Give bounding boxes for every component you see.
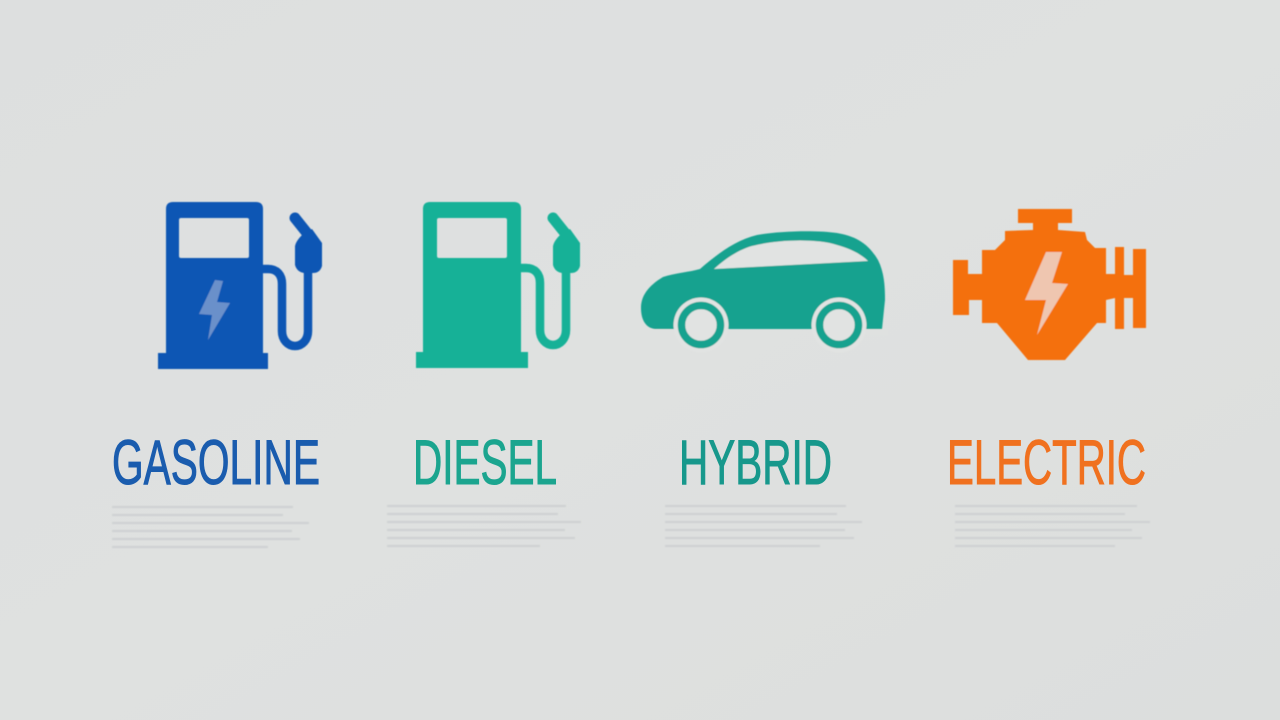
text block: electric description	[955, 505, 1150, 547]
icon: gasoline bolt	[199, 280, 230, 340]
icon: gasoline pump	[158, 202, 322, 369]
text block: diesel description	[387, 505, 581, 547]
car window	[714, 241, 868, 269]
heading: gasoline: GASOLINE	[112, 428, 320, 498]
heading: diesel: DIESEL	[413, 428, 557, 498]
text block: hybrid description	[665, 505, 862, 547]
text block: gasoline description	[112, 506, 309, 548]
heading: electric: ELECTRIC	[947, 428, 1146, 498]
rear wheel	[812, 298, 866, 352]
front wheel	[674, 298, 728, 352]
icon: electric engine	[953, 209, 1146, 360]
icon: hybrid car	[640, 231, 888, 352]
heading: hybrid: HYBRID	[679, 428, 832, 498]
icon: engine bolt	[1025, 252, 1068, 335]
icon: diesel pump	[416, 202, 580, 368]
